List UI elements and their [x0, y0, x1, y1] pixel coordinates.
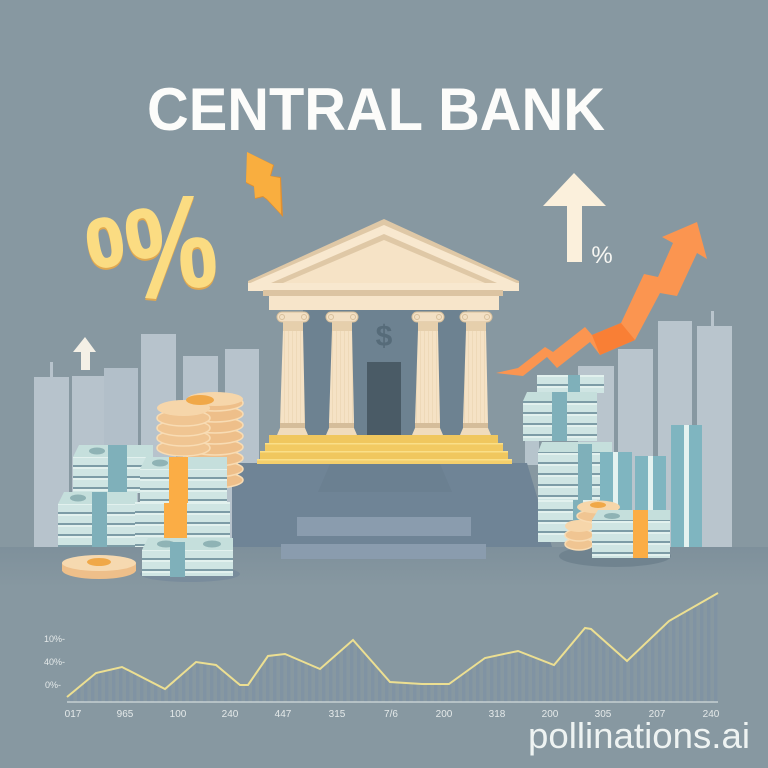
- x axis labels: 315: [329, 709, 346, 720]
- coin stack front: [157, 395, 214, 456]
- column 3: [412, 312, 444, 435]
- left coin stacks: [157, 392, 243, 488]
- money stack b: [523, 392, 597, 441]
- money stack c: [538, 442, 612, 500]
- icon: up arrow with percent: %: [591, 242, 613, 269]
- y axis labels: 40%-: [44, 657, 65, 667]
- chart axis: [67, 701, 718, 703]
- x axis labels: 207: [649, 709, 666, 720]
- x axis labels: 7/6: [384, 709, 398, 720]
- watermark: pollinations.ai: [528, 715, 750, 756]
- icon: percent symbol: 0: [176, 225, 220, 305]
- right skyline bars: [525, 311, 732, 547]
- icon: up arrow with percent: [543, 173, 613, 269]
- teal bar 3: [671, 425, 702, 547]
- x axis labels: 318: [489, 709, 506, 720]
- money stack 1: [73, 445, 153, 493]
- line chart: [44, 593, 720, 720]
- column 4: [460, 312, 492, 435]
- coin stack back: [187, 392, 243, 488]
- icon: percent symbol: 0: [80, 202, 130, 284]
- right money stacks: [523, 375, 671, 567]
- right coin stacks: [565, 500, 620, 550]
- y axis labels: 0%-: [45, 680, 61, 690]
- x axis labels: 100: [170, 709, 187, 720]
- back wall: [303, 308, 467, 436]
- x axis labels: 240: [222, 709, 239, 720]
- x axis labels: 965: [117, 709, 134, 720]
- column 2: [326, 312, 358, 435]
- door: [367, 362, 401, 435]
- money stack 4: [135, 502, 230, 547]
- money stack a: [537, 375, 604, 393]
- teal bars: [599, 425, 702, 547]
- flat coin: [62, 555, 136, 579]
- shadow under right stacks: [559, 545, 671, 567]
- money stack 2: [58, 492, 137, 547]
- shadow under front stack: [140, 566, 240, 582]
- icon: percent symbol: 0: [119, 195, 169, 277]
- money stack 5 front: [142, 538, 233, 577]
- entablature: [263, 290, 503, 296]
- plinth upper slab: [297, 517, 471, 536]
- x axis labels: 240: [703, 709, 720, 720]
- x axis labels: 200: [436, 709, 453, 720]
- icon: percent symbol: 0: [80, 204, 130, 286]
- x axis labels: 447: [275, 709, 292, 720]
- chart hatch area: [67, 593, 718, 702]
- icon: lightning bolt: [246, 152, 283, 217]
- rising orange arrow: [496, 222, 707, 376]
- icon: small white arrow: [73, 337, 96, 370]
- icon: percent symbol: 0: [119, 193, 169, 275]
- x axis labels: 305: [595, 709, 612, 720]
- dollar sign: $: [376, 320, 393, 353]
- pediment roof: [248, 219, 519, 291]
- teal bar 1: [599, 452, 632, 547]
- left skyline bars: [34, 334, 259, 547]
- ground band: [0, 547, 768, 587]
- y axis labels: [44, 634, 65, 690]
- x axis labels: [65, 709, 720, 720]
- plinth: [232, 463, 552, 559]
- money stack e front: [592, 510, 670, 558]
- money stack 3: [140, 457, 227, 503]
- plinth lower slab: [281, 544, 486, 559]
- yellow steps: [257, 435, 512, 464]
- left money stacks: [58, 445, 240, 582]
- column 1: [277, 312, 309, 435]
- x axis labels: 200: [542, 709, 559, 720]
- y axis labels: 10%-: [44, 634, 65, 644]
- teal bar 2: [635, 456, 666, 547]
- central bank building: [248, 219, 519, 464]
- title: CENTRAL BANK: [147, 76, 605, 143]
- icon: percent symbol: 0: [176, 223, 220, 303]
- money stack d: [538, 500, 597, 542]
- chart line: [67, 593, 718, 697]
- x axis labels: 017: [65, 709, 82, 720]
- icon: percent symbol: [80, 193, 220, 305]
